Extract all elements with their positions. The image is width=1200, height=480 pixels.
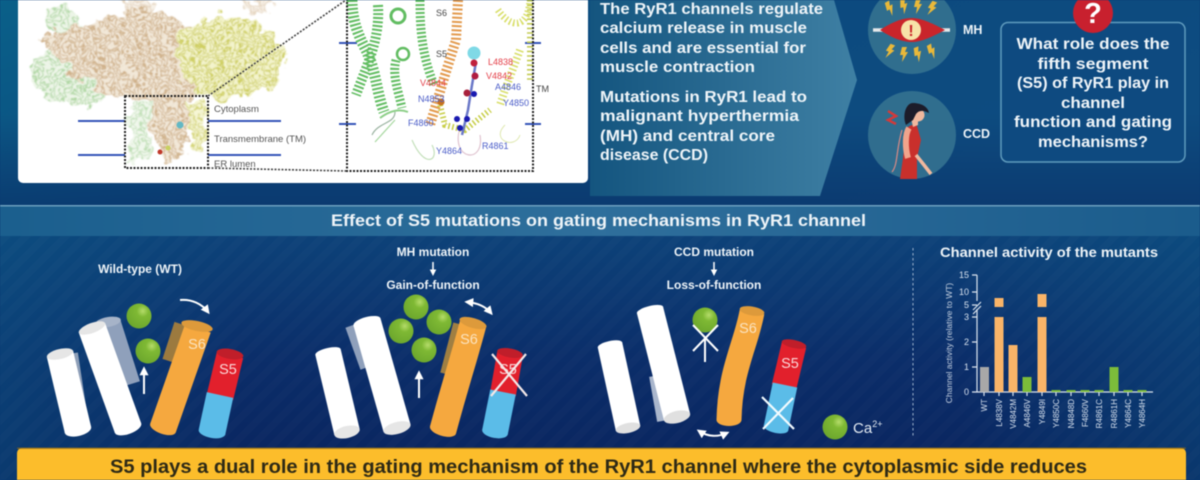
y tick labels: 15 (959, 270, 969, 280)
text: RyR1 function: calcium release in muscle (600, 20, 807, 37)
protein structure: full channel (32, 0, 285, 160)
label: MH: MH (963, 23, 982, 37)
x labels: Y4850C (1052, 399, 1061, 428)
inset: labels: R4861 (482, 141, 509, 151)
y tick labels: 1 (964, 362, 969, 372)
x labels: Y4849I (1038, 399, 1047, 424)
helix: S6 (148, 318, 214, 438)
inset: labels: L4838 (488, 57, 513, 67)
icon: question mark (1073, 0, 1113, 33)
inset: mutation sites (438, 46, 480, 131)
arrow: ion flow (418, 373, 420, 398)
helix: S5 mutated: S5 (781, 356, 799, 372)
panel: MH mutation channel (314, 245, 527, 441)
inset: labels: A4846 (495, 82, 521, 92)
y tick labels: 10 (959, 287, 969, 297)
text: RyR1 function: malignant hyperthermia (600, 108, 799, 125)
text: RyR1 function: disease (CCD) (600, 147, 708, 164)
helix: inner white (352, 314, 412, 437)
label: CCD: CCD (963, 127, 990, 141)
helix: inner white (77, 315, 143, 438)
helix: S5 mutated (481, 346, 527, 440)
panel: CCD mutation channel (597, 245, 882, 440)
legend: calcium (822, 414, 882, 440)
arrow: ion flow (143, 369, 145, 394)
text: RyR1 function: cells and are essential for (600, 40, 806, 57)
calcium ions (126, 304, 160, 364)
y tick labels: 3 (964, 312, 969, 322)
helix: S6: S6 (739, 321, 757, 337)
calcium ions (388, 294, 452, 362)
helix: S5 mutated (762, 337, 807, 435)
x labels: Y4864H (1138, 399, 1147, 428)
structure labels (214, 104, 306, 170)
helix: S6: S6 (460, 332, 478, 348)
x labels: R4861H (1110, 399, 1119, 428)
panel: RyR1 structure (18, 0, 588, 183)
conclusion banner (17, 448, 1186, 480)
helix: S6 (716, 304, 765, 426)
helix: inner white (636, 303, 692, 426)
icon: malignant hyperthermia muscle: ! (908, 23, 914, 40)
x labels: N4848D (1067, 399, 1076, 428)
callout: research question (1001, 0, 1185, 162)
inset: labels: V4842 (486, 71, 512, 81)
helix: S5 mutated: S5 (499, 362, 517, 378)
chart title: Channel activity of the mutants (940, 245, 1158, 260)
zoom box: small (125, 96, 208, 168)
conclusion banner: S5 plays a dual role in the gating mechanism of the RyR1 channel where the cytoplasmic side reduces (110, 456, 1087, 478)
x labels: L4838V (995, 398, 1004, 427)
legend: calcium: Ca (853, 420, 872, 437)
y tick labels: 2 (964, 337, 969, 347)
icon: malignant hyperthermia muscle (868, 0, 956, 74)
structure labels: ER lumen (214, 159, 256, 170)
helix: outer white (314, 345, 361, 441)
y tick labels (959, 270, 969, 397)
heading bar: effect of S5 mutations: Effect of S5 mutations on gating mechanisms in RyR1 channel (331, 211, 866, 230)
label: wild-type: Wild-type (WT) (98, 262, 182, 276)
structure labels: Transmembrane (TM) (214, 134, 306, 145)
x labels: V4842M (1009, 399, 1018, 429)
arrow: S6 movement (699, 431, 727, 436)
arrow: S6 movement (180, 300, 208, 312)
text: question: mechanisms? (1038, 134, 1148, 151)
y axis label: Channel activity (relative to WT) (944, 283, 954, 403)
text: RyR1 function: The RyR1 channels regulate (600, 1, 823, 18)
helix: S6 (428, 314, 488, 439)
x labels: Y4864C (1124, 399, 1133, 428)
text: RyR1 function: Mutations in RyR1 lead to (600, 89, 807, 106)
icon: central core disease figure (868, 91, 956, 179)
zoom connectors (208, 0, 347, 171)
panel: wild-type channel (46, 262, 244, 440)
legend: calcium: 2+ (872, 419, 882, 429)
y axis (972, 275, 1153, 396)
inset: labels: TM (536, 84, 549, 94)
panel: background arrow with text (590, 0, 857, 196)
x labels: A4846V (1023, 398, 1032, 427)
arrow: S6 movement (467, 302, 491, 313)
helix: outer white (46, 346, 93, 439)
y tick labels: 5 (964, 300, 969, 310)
label: MH mutation: MH mutation (397, 245, 469, 259)
inset: labels: F4860 (408, 118, 434, 128)
text: question: function and gating (1014, 114, 1172, 131)
text: question: channel (1061, 95, 1125, 112)
helix: S6: S6 (188, 337, 206, 353)
protein highlights (158, 122, 184, 154)
bars (980, 294, 1146, 392)
inset: labels: Y4864 (436, 146, 462, 156)
label: MH mutation (386, 245, 480, 292)
heading bar: effect of S5 mutations (0, 205, 1200, 236)
x labels: F4860V (1081, 398, 1090, 427)
label: CCD mutation (667, 245, 761, 292)
text: RyR1 function: muscle contraction (600, 59, 755, 76)
inset: labels: N4853 (418, 94, 445, 104)
inset: labels: Y4850 (503, 98, 529, 108)
arrow: mutation to gain (432, 262, 434, 274)
text: question (1014, 36, 1172, 151)
helix: outer white (597, 338, 641, 435)
inset: labels: V4844 (420, 78, 446, 88)
text: question: (S5) of RyR1 play in (1017, 75, 1169, 92)
inset: labels: S5 (436, 49, 447, 59)
helix: S5 (198, 347, 244, 440)
inset: labels (408, 8, 549, 156)
arrow: blocked ion flow (693, 325, 718, 362)
label: MH mutation: Gain-of-function (386, 278, 480, 292)
label: CCD mutation: Loss-of-function (667, 278, 761, 292)
y tick labels: 0 (964, 387, 969, 397)
text: RyR1 function: (MH) and central core (600, 128, 775, 145)
x labels (980, 398, 1147, 429)
bar chart: channel activity of the mutants (940, 245, 1158, 429)
text: RyR1 function (600, 1, 823, 164)
structure labels: Cytoplasm (214, 104, 259, 115)
x labels: WT (980, 399, 989, 411)
x labels: R4861C (1095, 399, 1104, 428)
text: question: fifth segment (1038, 56, 1149, 73)
arrow: mutation to loss (713, 262, 715, 274)
inset: transmembrane helices (352, 0, 530, 159)
inset: labels: S6 (436, 8, 447, 18)
calcium ion blocked (692, 308, 718, 332)
inset: zoom box (347, 0, 533, 171)
membrane lines (78, 43, 541, 155)
text: question: What role does the (1016, 36, 1170, 53)
label: CCD mutation: CCD mutation (674, 245, 754, 259)
helix: S5: S5 (219, 362, 237, 378)
